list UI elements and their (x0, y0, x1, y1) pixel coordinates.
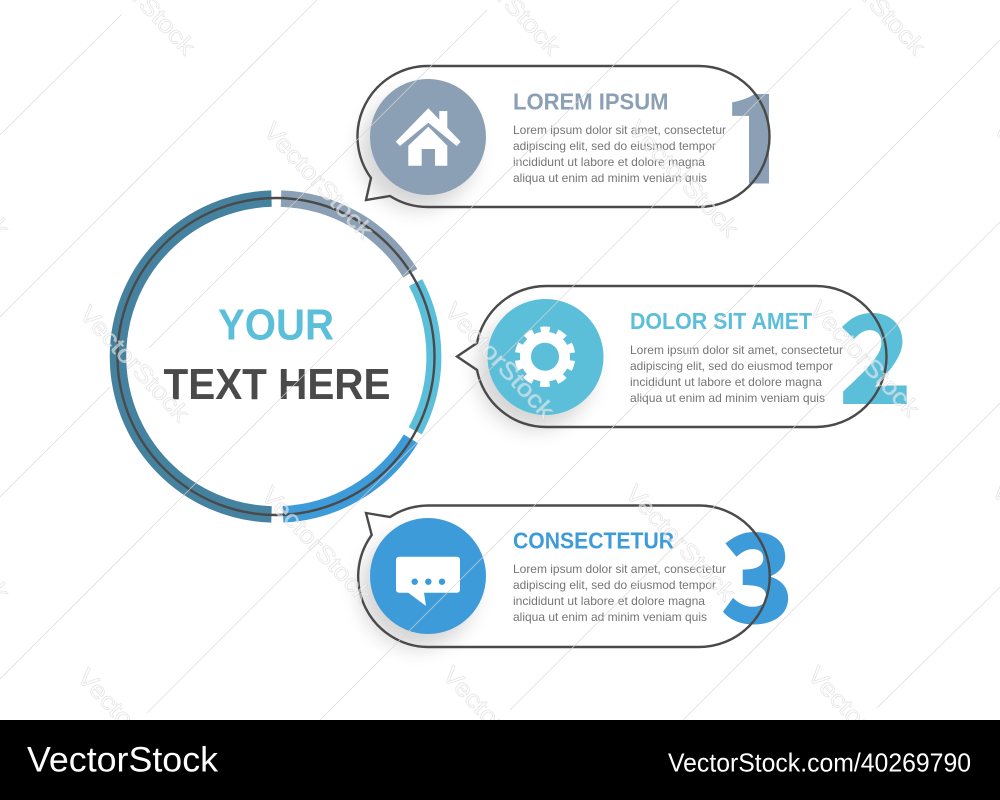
shadow 3 (360, 532, 476, 648)
center heading: your: YOUR (218, 300, 334, 350)
number 1: 1 (720, 42, 795, 220)
center text (164, 300, 390, 409)
footer bar (0, 720, 1000, 800)
body text 2: Lorem ipsum dolor sit amet, consectetur (630, 343, 843, 357)
watermark: VectorStock (74, 301, 195, 428)
icon circle 3 (370, 518, 486, 634)
body text 3 (513, 562, 726, 624)
bubble outline 1 (357, 66, 769, 207)
body text 2 (630, 343, 843, 405)
body text 3: adipiscing elit, sed do eiusmod tempor (513, 578, 716, 592)
ring segment: teal (118, 199, 272, 514)
panel 1 (353, 64, 771, 216)
body text 2: adipiscing elit, sed do eiusmod tempor (630, 359, 833, 373)
body text 1: Lorem ipsum dolor sit amet, consectetur (513, 123, 726, 137)
watermark: VectorStock (802, 662, 923, 789)
body text 2: aliqua ut enim ad minim veniam quis (630, 391, 825, 405)
icon: gear (518, 329, 572, 384)
body text 1 (513, 123, 726, 185)
watermark: VectorStock (437, 662, 558, 789)
shadow 2 (477, 313, 593, 429)
body text 2: incididunt ut labore et dolore magna (630, 375, 822, 389)
body text 3: aliqua ut enim ad minim veniam quis (513, 610, 707, 624)
center heading: text here: TEXT HERE (164, 360, 390, 409)
panel 2 (457, 262, 913, 440)
footer image id: VectorStock.com/40269790 (668, 748, 971, 778)
icon circle 2 (488, 299, 604, 415)
heading 2: DOLOR SIT AMET (630, 308, 812, 334)
body text 3: Lorem ipsum dolor sit amet, consectetur (513, 562, 726, 576)
ring segment: light blue (415, 283, 434, 431)
central ring (118, 198, 434, 515)
bubble outline 3 (358, 506, 770, 647)
ring thin outline (118, 198, 434, 515)
icon: chat bubble (396, 557, 460, 606)
panel 3 (358, 481, 795, 659)
icon circle 1 (370, 79, 486, 195)
watermark: VectorStock (623, 116, 744, 243)
ring segment: gray (281, 199, 410, 273)
body text 3: incididunt ut labore et dolore magna (513, 594, 705, 608)
watermark: VectorStock (72, 664, 193, 791)
body text 1: adipiscing elit, sed do eiusmod tempor (513, 139, 716, 153)
shadow 1 (360, 93, 476, 209)
watermark: VectorStock (804, 296, 925, 423)
heading 1: LOREM IPSUM (513, 88, 668, 114)
number 3: 3 (720, 481, 795, 659)
watermark: VectorStock (258, 118, 379, 245)
ring segment: blue (283, 439, 411, 514)
icon: house (396, 108, 461, 166)
watermark: VectorStock (620, 480, 741, 607)
watermark: VectorStock (256, 482, 377, 609)
body text 1: aliqua ut enim ad minim veniam quis (513, 171, 707, 185)
body text 1: incididunt ut labore et dolore magna (513, 155, 705, 169)
footer brand: VectorStock (27, 741, 219, 780)
number 2: 2 (838, 262, 913, 440)
bubble outline 2 (457, 286, 886, 427)
heading 3: CONSECTETUR (513, 527, 674, 553)
watermark: VectorStock (439, 298, 560, 425)
